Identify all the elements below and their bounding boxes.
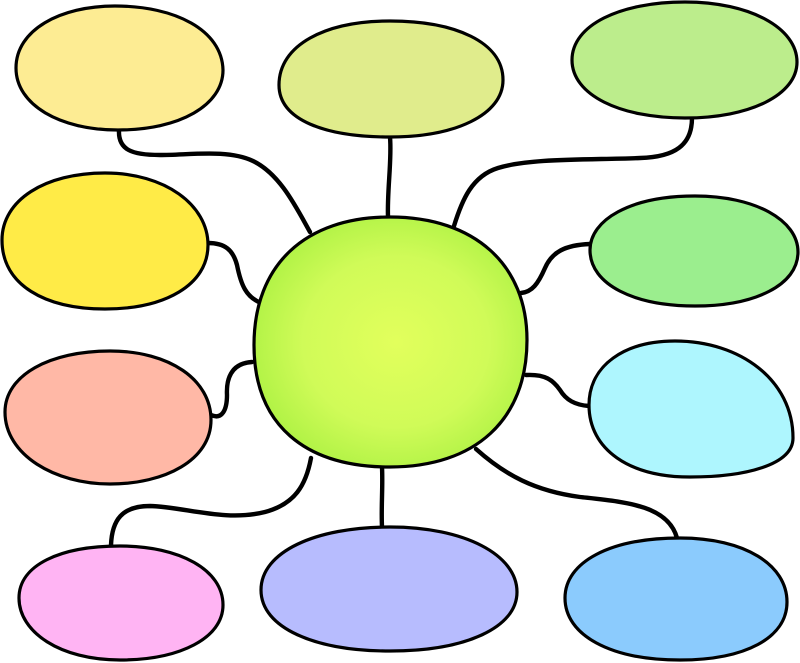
connector: upper right	[521, 244, 590, 293]
connector: bottom left	[111, 458, 311, 545]
node: top right green	[572, 2, 797, 118]
central node	[254, 217, 527, 467]
connector: lower left	[211, 362, 252, 416]
connector: upper left	[208, 243, 261, 303]
node: bottom right blue	[565, 538, 787, 660]
node: upper left bright yellow	[2, 173, 208, 309]
node: bottom left pink	[19, 546, 223, 660]
connector: top left	[119, 130, 310, 232]
connector: lower right	[526, 375, 589, 406]
connector: bottom centre	[380, 467, 384, 527]
connector: top centre	[388, 137, 390, 217]
node: upper right green	[590, 196, 798, 306]
node: lower right cyan	[589, 341, 793, 477]
node: top left yellow	[16, 6, 223, 130]
node: lower left salmon	[5, 351, 211, 484]
node: top centre lime	[279, 21, 503, 137]
connector: top right	[454, 118, 692, 226]
node: bottom centre periwinkle	[261, 527, 517, 651]
connector: bottom right	[476, 449, 677, 538]
